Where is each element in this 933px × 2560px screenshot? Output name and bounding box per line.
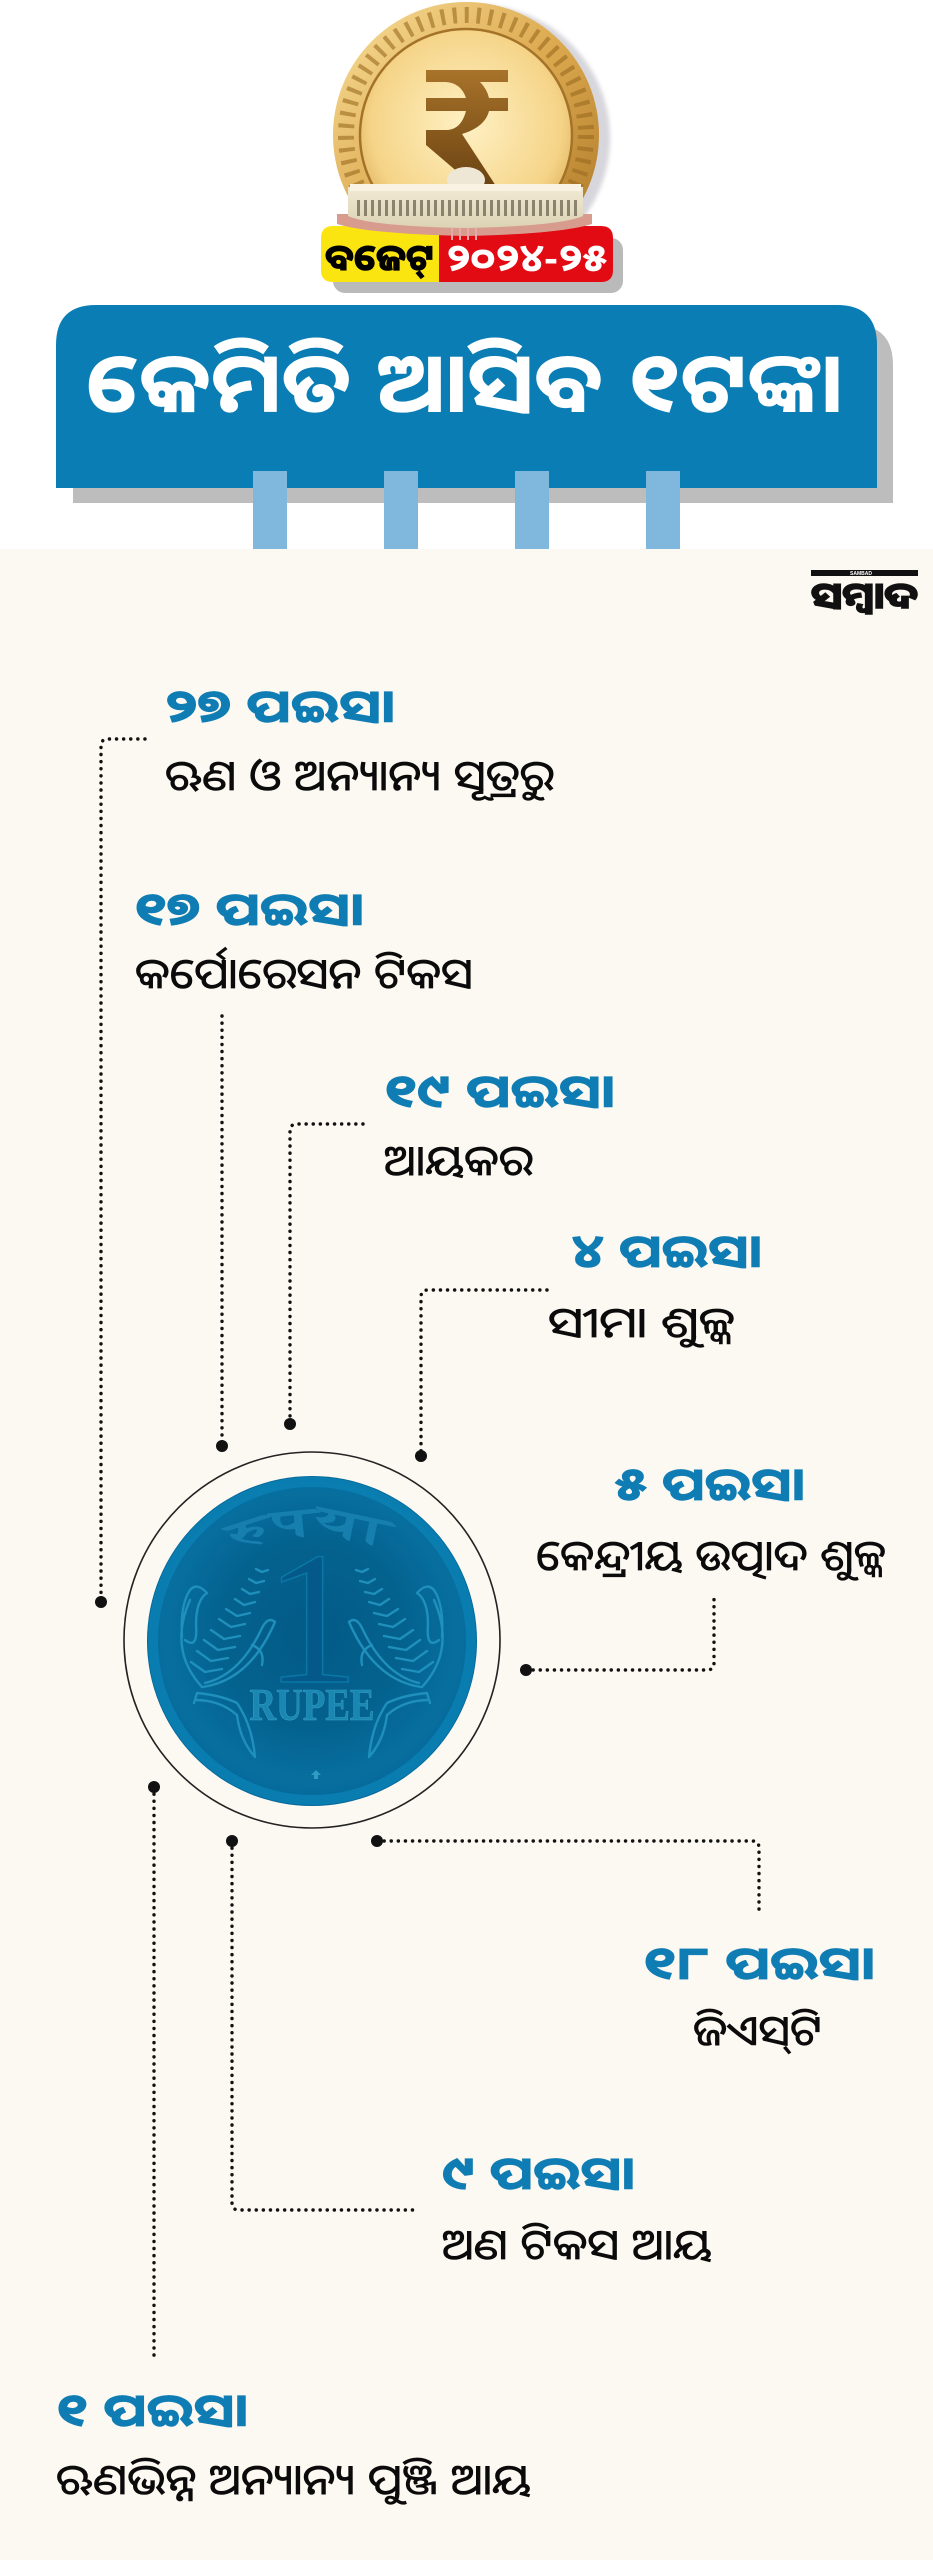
- callout: 5 paise: କେନ୍ଦ୍ରୀୟ ଉତ୍ପାଦ ଶୁଳ୍କ: [536, 1532, 886, 1581]
- callout: 5 paise: [520, 1458, 886, 1676]
- logo: Sambad: SAMBAD: [850, 571, 872, 577]
- banner supports: [253, 471, 680, 549]
- cream content panel: [0, 549, 933, 2560]
- arc for legend: [233, 1535, 392, 1552]
- callout: 18 paise: ୧୮ ପଇସା: [643, 1937, 875, 1989]
- callout: 18 paise: [371, 1835, 875, 2054]
- badge: budget 2024-25: [321, 226, 623, 293]
- heading: କେମିତି ଆସିବ ୧ଟଙ୍କା: [86, 336, 843, 430]
- connector: [101, 739, 145, 1602]
- connector: [232, 1841, 415, 2210]
- callout: 17 paise: [134, 883, 473, 1452]
- coin legend: rupaya: रुपया: [222, 1506, 396, 1546]
- wheat right: [349, 1569, 443, 1757]
- badge label: year: ୨୦୨୪-୨୫: [446, 238, 607, 280]
- connector: [526, 1597, 714, 1670]
- callout: 4 paise: ସୀମା ଶୁଳ୍କ: [548, 1299, 735, 1348]
- connector: [421, 1290, 547, 1456]
- logo: Sambad: ସମ୍ବାଦ: [811, 575, 918, 616]
- callout: 17 paise: ୧୭ ପଇସା: [134, 883, 364, 935]
- callout: 17 paise: କର୍ପୋରେସନ ଟିକସ: [135, 947, 473, 997]
- callout: 9 paise: ଅଣ ଟିକସ ଆୟ: [442, 2221, 712, 2268]
- callout: 27 paise: [95, 680, 554, 1608]
- wheat left: [181, 1569, 275, 1757]
- icon: rupee symbol: [426, 70, 508, 186]
- callout: 4 paise: ୪ ପଇସା: [572, 1225, 762, 1277]
- callout: 19 paise: [284, 1065, 615, 1430]
- callout: 19 paise: ଆୟକର: [384, 1137, 533, 1184]
- illustration: blue one rupee coin: [123, 1451, 501, 1829]
- callout: 1 paisa: ୧ ପଇସା: [56, 2384, 248, 2436]
- callout: 1 paisa: [56, 1781, 531, 2505]
- connector: [220, 1016, 224, 1446]
- callout: 9 paise: ୯ ପଇସା: [442, 2147, 635, 2199]
- coin word: rupee: RUPEE: [250, 1680, 374, 1730]
- numeral 1: 1: [264, 1514, 360, 1724]
- connector: [290, 1124, 363, 1424]
- icon: gold rupee coin: [333, 2, 610, 271]
- callout: 27 paise: ୨୭ ପଇସା: [164, 680, 395, 732]
- badge label: budget: ବଜେଟ୍: [325, 237, 434, 279]
- callout: 19 paise: ୧୯ ପଇସା: [384, 1065, 615, 1117]
- callout: 5 paise: ୫ ପଇସା: [615, 1458, 805, 1510]
- connector: [377, 1841, 759, 1912]
- icon: parliament building: [337, 184, 592, 240]
- callout: 18 paise: ଜିଏସ୍‌ଟି: [693, 2007, 822, 2054]
- callout: 27 paise: ଋଣ ଓ ଅନ୍ୟାନ୍ୟ ସୂତ୍ରରୁ: [165, 752, 554, 801]
- callout: 9 paise: [226, 1835, 712, 2268]
- panel: title banner: [56, 305, 893, 549]
- mint mark: [311, 1770, 321, 1779]
- callout: 4 paise: [415, 1225, 762, 1462]
- callout: 1 paisa: ଋଣଭିନ୍ନ ଅନ୍ୟାନ୍ୟ ପୁଞ୍ଜି ଆୟ: [56, 2456, 531, 2505]
- ring: [124, 1452, 500, 1828]
- connector: [152, 1787, 156, 2362]
